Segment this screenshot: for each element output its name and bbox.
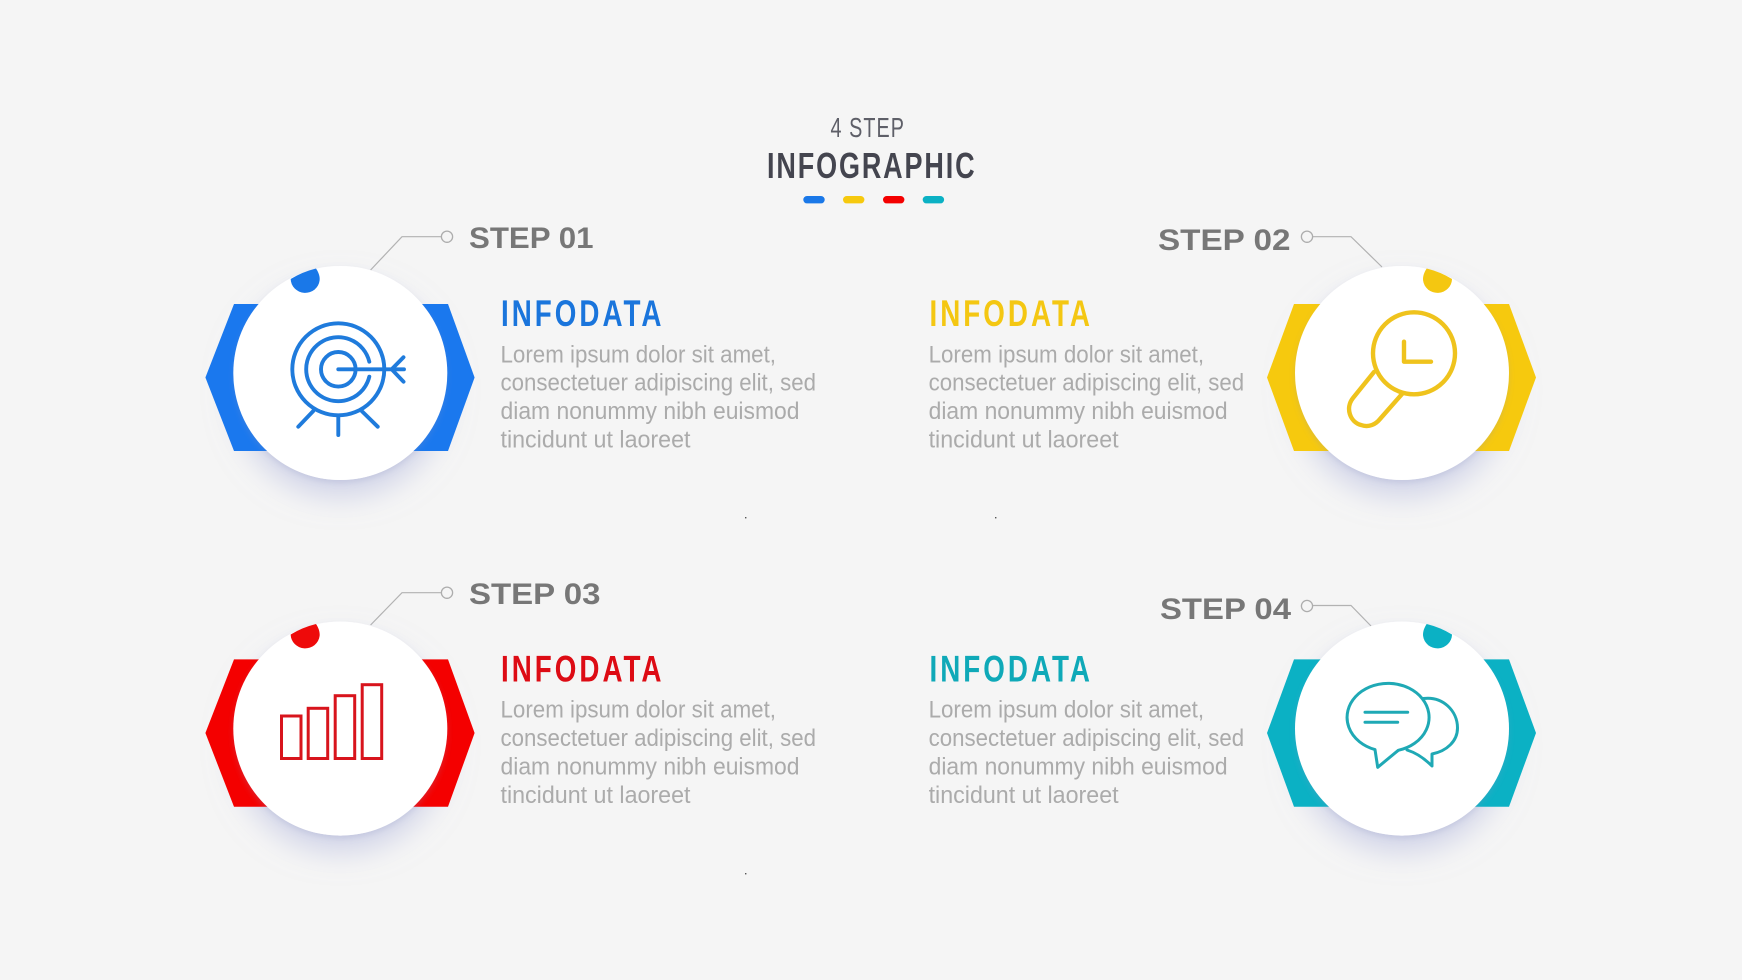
heading: infographic: INFOGRAPHIC bbox=[767, 145, 976, 186]
step 04 body text: consectetuer adipiscing elit, sed bbox=[929, 725, 1244, 752]
step 03 body text: tincidunt ut laoreet bbox=[500, 782, 691, 809]
step 02 label: STEP 02 bbox=[1158, 224, 1290, 257]
step 01 label: STEP 01 bbox=[469, 222, 594, 255]
step 02 circle shadow bbox=[1295, 266, 1509, 480]
icon: magnifier with clock bbox=[1349, 312, 1455, 426]
step 01 body text: tincidunt ut laoreet bbox=[500, 426, 691, 453]
step 03 body text: Lorem ipsum dolor sit amet, bbox=[500, 697, 776, 724]
step 01 heading: INFODATA bbox=[501, 293, 664, 334]
step 01 circle bbox=[233, 266, 447, 480]
step 01 body text: diam nonummy nibh euismod bbox=[500, 398, 800, 425]
step 01 hexagon bbox=[205, 304, 475, 451]
step 04 tab bbox=[1423, 624, 1452, 648]
icon: speech bubbles bbox=[1347, 683, 1458, 767]
step 02 body text: consectetuer adipiscing elit, sed bbox=[929, 370, 1244, 397]
panel: step 03 bbox=[205, 578, 816, 836]
icon: target with arrow bbox=[292, 323, 404, 435]
step 03 tab bbox=[291, 624, 320, 648]
colour dots bbox=[803, 196, 944, 203]
step 04 body text: Lorem ipsum dolor sit amet, bbox=[929, 697, 1204, 724]
step 02 hexagon bbox=[1267, 304, 1536, 451]
step 03 body text: consectetuer adipiscing elit, sed bbox=[500, 725, 816, 752]
step 04 leader line bbox=[1301, 600, 1371, 626]
step 01 body text: consectetuer adipiscing elit, sed bbox=[500, 370, 816, 397]
step 03 leader line bbox=[371, 587, 453, 625]
step 02 body text: tincidunt ut laoreet bbox=[929, 426, 1119, 453]
step 02 circle bbox=[1295, 266, 1509, 480]
step 04 circle shadow bbox=[1295, 622, 1509, 836]
step 04 body text bbox=[929, 697, 1244, 809]
step 04 heading: INFODATA bbox=[930, 648, 1093, 689]
icon: bar chart bbox=[282, 685, 382, 758]
step 03 circle bbox=[233, 622, 447, 836]
step 04 label: STEP 04 bbox=[1160, 593, 1291, 626]
tiny specks bbox=[745, 517, 996, 874]
step 04 circle bbox=[1295, 622, 1509, 836]
title bbox=[767, 112, 976, 186]
step 01 body text bbox=[500, 341, 816, 453]
step 03 hexagon bbox=[205, 659, 475, 807]
panel: step 02 bbox=[929, 224, 1536, 480]
step 04 body text: diam nonummy nibh euismod bbox=[929, 753, 1228, 780]
step 04 hexagon bbox=[1267, 659, 1536, 807]
panel: step 04 bbox=[929, 593, 1536, 836]
step 02 body text: diam nonummy nibh euismod bbox=[929, 398, 1228, 425]
step 04 body text: tincidunt ut laoreet bbox=[929, 782, 1119, 809]
step 02 leader line bbox=[1301, 231, 1382, 267]
panel: step 01 bbox=[205, 222, 816, 480]
step 03 circle shadow bbox=[233, 622, 447, 836]
step 01 circle shadow bbox=[233, 266, 447, 480]
step 02 body text bbox=[929, 341, 1244, 453]
step 02 tab bbox=[1423, 268, 1452, 293]
step 03 label: STEP 03 bbox=[469, 578, 600, 611]
step 01 tab bbox=[291, 268, 320, 293]
step 03 heading: INFODATA bbox=[501, 648, 664, 689]
step 01 body text: Lorem ipsum dolor sit amet, bbox=[500, 341, 776, 368]
step 02 body text: Lorem ipsum dolor sit amet, bbox=[929, 341, 1204, 368]
step 01 leader line bbox=[371, 231, 453, 270]
subtitle: 4 step: 4 STEP bbox=[830, 112, 905, 143]
step 03 body text bbox=[500, 697, 816, 809]
step 02 heading: INFODATA bbox=[930, 293, 1093, 334]
step 03 body text: diam nonummy nibh euismod bbox=[500, 753, 800, 780]
